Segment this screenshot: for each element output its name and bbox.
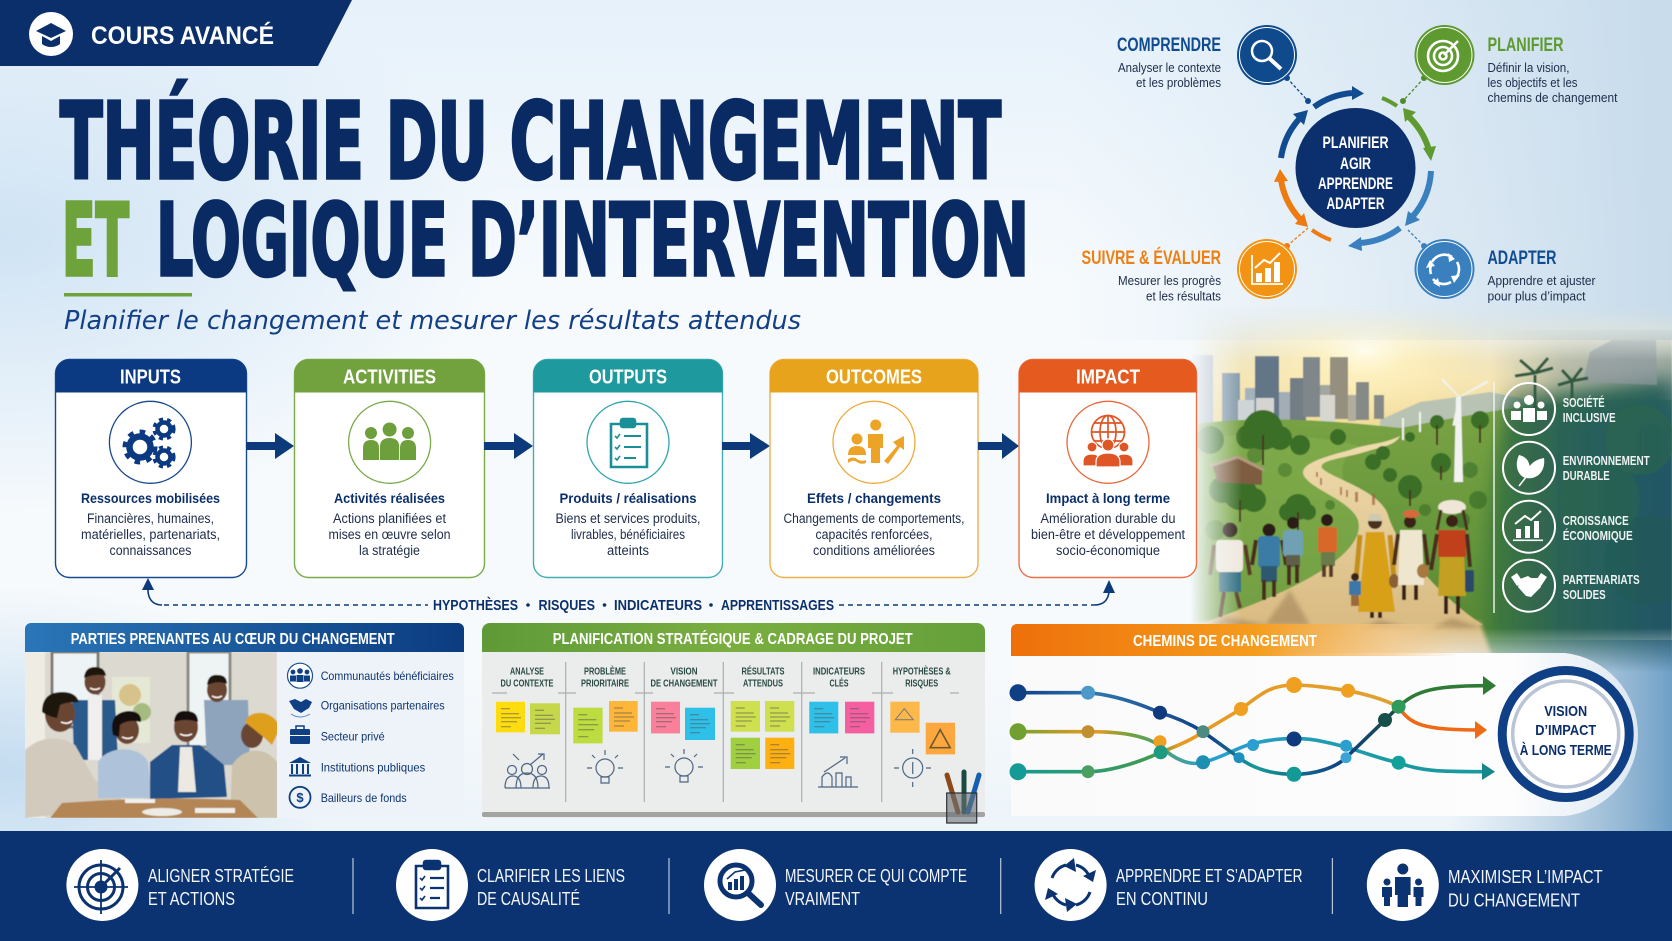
- panel: activities: [294, 360, 484, 578]
- panel: inputs: Ressources mobilisées: [81, 490, 220, 506]
- takeaway: apprendre et s'adapter en continu: APPRENDRE ET S’ADAPTER: [1116, 865, 1302, 886]
- icon: globe and people: [1067, 401, 1149, 483]
- step: comprendre: [1117, 25, 1297, 90]
- subtitle: Planifier le changement et mesurer les résultats attendus: [64, 306, 801, 336]
- panel: activities: ACTIVITIES: [343, 366, 436, 388]
- column headings: CLÉS: [830, 677, 848, 690]
- list: stakeholders: [288, 663, 454, 808]
- step: suivre et évaluer: Mesurer les progrès: [1118, 273, 1221, 288]
- panel: outputs: OUTPUTS: [589, 366, 667, 388]
- panel: outcomes: OUTCOMES: [826, 366, 922, 388]
- item: organisations partenaires: Organisations partenaires: [321, 698, 445, 712]
- panel: outputs: Biens et services produits,: [556, 511, 700, 526]
- item: bailleurs de fonds: [290, 787, 407, 808]
- takeaway: aligner stratégie et actions: ALIGNER STRATÉGIE: [148, 865, 294, 886]
- step: comprendre: Analyser le contexte: [1118, 60, 1221, 75]
- icon: gears: [109, 401, 191, 483]
- list: long-term impact benefits: [1494, 382, 1650, 613]
- step: suivre et évaluer: SUIVRE & ÉVALUER: [1082, 247, 1221, 269]
- step: planifier: PLANIFIER: [1488, 35, 1564, 56]
- connector dots: [1284, 75, 1427, 249]
- item: secteur privé: [290, 726, 385, 744]
- panel: impact: [1019, 360, 1196, 578]
- item: secteur privé: Secteur privé: [321, 730, 385, 744]
- panel: outputs: livrables, bénéficiaires: [571, 527, 685, 542]
- takeaway: clarifier les liens de causalité: CLARIFIER LES LIENS: [477, 865, 625, 886]
- feedback loop: hypothèses, risques, indicateurs, apprentissages: RISQUES: [538, 597, 595, 614]
- icon: cycle: [1426, 253, 1460, 287]
- takeaway: clarifier les liens de causalité: DE CAUSALITÉ: [477, 888, 580, 909]
- sticky notes: [496, 701, 955, 769]
- panel: inputs: Financières, humaines,: [87, 511, 214, 526]
- arrow: activities to outputs: [484, 433, 533, 459]
- takeaway: maximiser l'impact du changement: [1367, 849, 1603, 921]
- benefit: partenariats solides: SOLIDES: [1563, 587, 1606, 602]
- step: planifier: Définir la vision,: [1488, 60, 1570, 75]
- panel: activities: Activités réalisées: [334, 490, 445, 506]
- panel: impact: socio-économique: [1056, 543, 1160, 558]
- illustration: walkers on the road: [1200, 500, 1482, 630]
- photo: team meeting: [25, 652, 282, 818]
- accent rule under title: [64, 293, 192, 296]
- benefit: croissance économique: CROISSANCE: [1563, 513, 1629, 528]
- step: adapter: pour plus d’impact: [1488, 288, 1586, 304]
- takeaway: apprendre et s'adapter en continu: EN CONTINU: [1116, 888, 1208, 909]
- step: planifier: [1414, 25, 1618, 105]
- title: ET: [62, 182, 129, 299]
- feedback loop: hypothèses, risques, indicateurs, apprentissages: [142, 578, 1115, 614]
- takeaway: aligner stratégie et actions: ET ACTIONS: [148, 888, 235, 909]
- badge: cours avancé: COURS AVANCÉ: [91, 21, 274, 50]
- hub: planifier agir apprendre adapter: [1296, 108, 1416, 228]
- step: comprendre: et les problèmes: [1136, 75, 1221, 90]
- item: bailleurs de fonds: Bailleurs de fonds: [321, 791, 407, 805]
- feedback loop: hypothèses, risques, indicateurs, apprentissages: INDICATEURS: [614, 597, 702, 614]
- item: institutions publiques: [289, 757, 425, 776]
- benefit: partenariats solides: PARTENARIATS: [1563, 572, 1640, 587]
- diagram: adaptive management cycle: [1082, 25, 1618, 304]
- benefit: environnement durable: [1503, 442, 1650, 494]
- panel: planification stratégique: [482, 623, 985, 823]
- column headings: ATTENDUS: [743, 678, 783, 690]
- item: bailleurs de fonds: $: [296, 790, 304, 805]
- callout: vision d'impact à long terme: D’IMPACT: [1535, 722, 1596, 739]
- benefit: croissance économique: [1503, 501, 1633, 553]
- item: organisations partenaires: [289, 698, 445, 717]
- step: suivre et évaluer: et les résultats: [1146, 288, 1221, 304]
- item: institutions publiques: Institutions publiques: [321, 760, 425, 774]
- panel: outcomes: [770, 360, 978, 578]
- takeaway: maximiser l'impact du changement: DU CHANGEMENT: [1448, 890, 1580, 910]
- feedback loop: hypothèses, risques, indicateurs, apprentissages: APPRENTISSAGES: [721, 597, 834, 614]
- arrow: outputs to outcomes: [722, 433, 770, 459]
- panel: parties prenantes: PARTIES PRENANTES AU CŒUR DU CHANGEMENT: [71, 631, 395, 648]
- step: planifier: les objectifs et les: [1488, 75, 1578, 90]
- panel: outcomes: Changements de comportements,: [784, 511, 964, 526]
- icon: target: [1428, 41, 1458, 71]
- step: planifier: chemins de changement: [1488, 90, 1618, 105]
- panel: inputs: INPUTS: [120, 366, 181, 388]
- panel: activities: la stratégie: [359, 543, 420, 558]
- cycle arrows: [1274, 86, 1436, 251]
- benefit: environnement durable: DURABLE: [1563, 468, 1610, 483]
- icon: magnifier: [1252, 41, 1281, 69]
- hub: planifier agir apprendre adapter: AGIR: [1340, 155, 1371, 173]
- panel: inputs: [56, 360, 246, 578]
- icon: graduation cap: [29, 12, 73, 56]
- footer band: [0, 831, 1672, 941]
- panel: impact: bien-être et développement: [1031, 527, 1185, 542]
- panel: chemins de changement: CHEMINS DE CHANGEMENT: [1133, 633, 1317, 650]
- takeaway: aligner stratégie et actions: [66, 849, 294, 921]
- column headings: RISQUES: [905, 678, 938, 690]
- title: THÉORIE DU CHANGEMENT: [60, 80, 1001, 203]
- whiteboard sketches: [505, 749, 931, 788]
- panel: outputs: [534, 360, 722, 578]
- item: communautés bénéficiaires: [288, 663, 454, 688]
- panel: activities: mises en œuvre selon: [328, 527, 450, 542]
- column headings: DE CHANGEMENT: [650, 678, 718, 690]
- icon: target: [74, 860, 128, 914]
- panel: outcomes: capacités renforcées,: [816, 527, 932, 542]
- step: adapter: ADAPTER: [1488, 248, 1557, 269]
- icon: magnifier with chart: [720, 865, 761, 905]
- icon: people growth: [833, 401, 915, 483]
- icon: people: [1382, 864, 1424, 907]
- hub: planifier agir apprendre adapter: APPRENDRE: [1318, 175, 1393, 193]
- pen holder: [947, 772, 979, 823]
- panel: impact: Amélioration durable du: [1040, 511, 1176, 526]
- column headings: HYPOTHÈSES &: [893, 664, 951, 677]
- title: [60, 80, 1029, 299]
- panel: outcomes: Effets / changements: [807, 490, 941, 506]
- icon: clipboard: [416, 861, 448, 908]
- callout: vision d'impact à long terme: VISION: [1544, 703, 1587, 720]
- benefit: société inclusive: SOCIÉTÉ: [1563, 395, 1605, 410]
- column headings: VISION: [670, 665, 698, 677]
- callout: vision d'impact à long terme: [1502, 670, 1629, 798]
- feedback loop: hypothèses, risques, indicateurs, apprentissages: HYPOTHÈSES: [433, 597, 518, 614]
- step: adapter: [1414, 239, 1596, 304]
- callout: vision d'impact à long terme: À LONG TERME: [1520, 742, 1612, 759]
- pathway nodes: [1010, 677, 1406, 782]
- column headings: PROBLÈME: [584, 664, 626, 677]
- takeaway: maximiser l'impact du changement: MAXIMISER L’IMPACT: [1448, 866, 1603, 887]
- step: suivre et évaluer: [1082, 239, 1297, 304]
- column headings: PRIORITAIRE: [581, 678, 629, 690]
- takeaway: mesurer ce qui compte vraiment: MESURER CE QUI COMPTE: [785, 865, 967, 886]
- column headings: RÉSULTATS: [742, 664, 784, 677]
- takeaway: mesurer ce qui compte vraiment: VRAIMENT: [785, 888, 860, 909]
- arrow: inputs to activities: [246, 433, 294, 459]
- title: LOGIQUE D’INTERVENTION: [156, 182, 1029, 299]
- step: comprendre: COMPRENDRE: [1117, 35, 1221, 56]
- takeaway: clarifier les liens de causalité: [396, 849, 625, 921]
- panel: outcomes: conditions améliorées: [813, 543, 935, 558]
- benefit: partenariats solides: [1503, 560, 1640, 612]
- badge: cours avancé: [0, 0, 352, 66]
- panel: outputs: atteints: [607, 543, 649, 558]
- benefit: société inclusive: [1503, 383, 1616, 435]
- panel: chemins de changement: [1010, 624, 1638, 816]
- panel: impact: Impact à long terme: [1046, 490, 1170, 506]
- arrow: outcomes to impact: [978, 433, 1019, 459]
- panel: impact: IMPACT: [1076, 366, 1140, 388]
- panel: parties prenantes: [25, 623, 464, 818]
- item: communautés bénéficiaires: Communautés bénéficiaires: [321, 669, 454, 683]
- hub: planifier agir apprendre adapter: PLANIFIER: [1322, 134, 1389, 152]
- column headings: ANALYSE: [510, 665, 544, 677]
- chart: change pathways: [1010, 676, 1496, 782]
- column headings: INDICATEURS: [813, 665, 865, 677]
- icon: clipboard checklist: [587, 401, 669, 483]
- column headings: [500, 664, 951, 690]
- hub: planifier agir apprendre adapter: ADAPTER: [1326, 195, 1385, 213]
- panel: outputs: Produits / réalisations: [560, 490, 697, 506]
- benefit: croissance économique: ÉCONOMIQUE: [1563, 528, 1633, 543]
- panel: planification stratégique: PLANIFICATION STRATÉGIQUE & CADRAGE DU PROJET: [553, 629, 913, 648]
- icon: bar chart: [1252, 253, 1283, 284]
- benefit: société inclusive: INCLUSIVE: [1563, 410, 1616, 425]
- icon: team: [349, 401, 431, 483]
- column headings: DU CONTEXTE: [500, 678, 554, 690]
- panel: inputs: matérielles, partenariats,: [81, 527, 220, 542]
- icon: cycle arrows: [1045, 858, 1096, 912]
- panel: inputs: connaissances: [110, 543, 192, 558]
- illustration: landscape of people walking towards a green city: [1192, 314, 1672, 670]
- panel: activities: Actions planifiées et: [333, 511, 446, 526]
- takeaway: apprendre et s'adapter en continu: [1035, 849, 1302, 921]
- step: adapter: Apprendre et ajuster: [1488, 273, 1596, 288]
- takeaway: mesurer ce qui compte vraiment: [704, 849, 967, 921]
